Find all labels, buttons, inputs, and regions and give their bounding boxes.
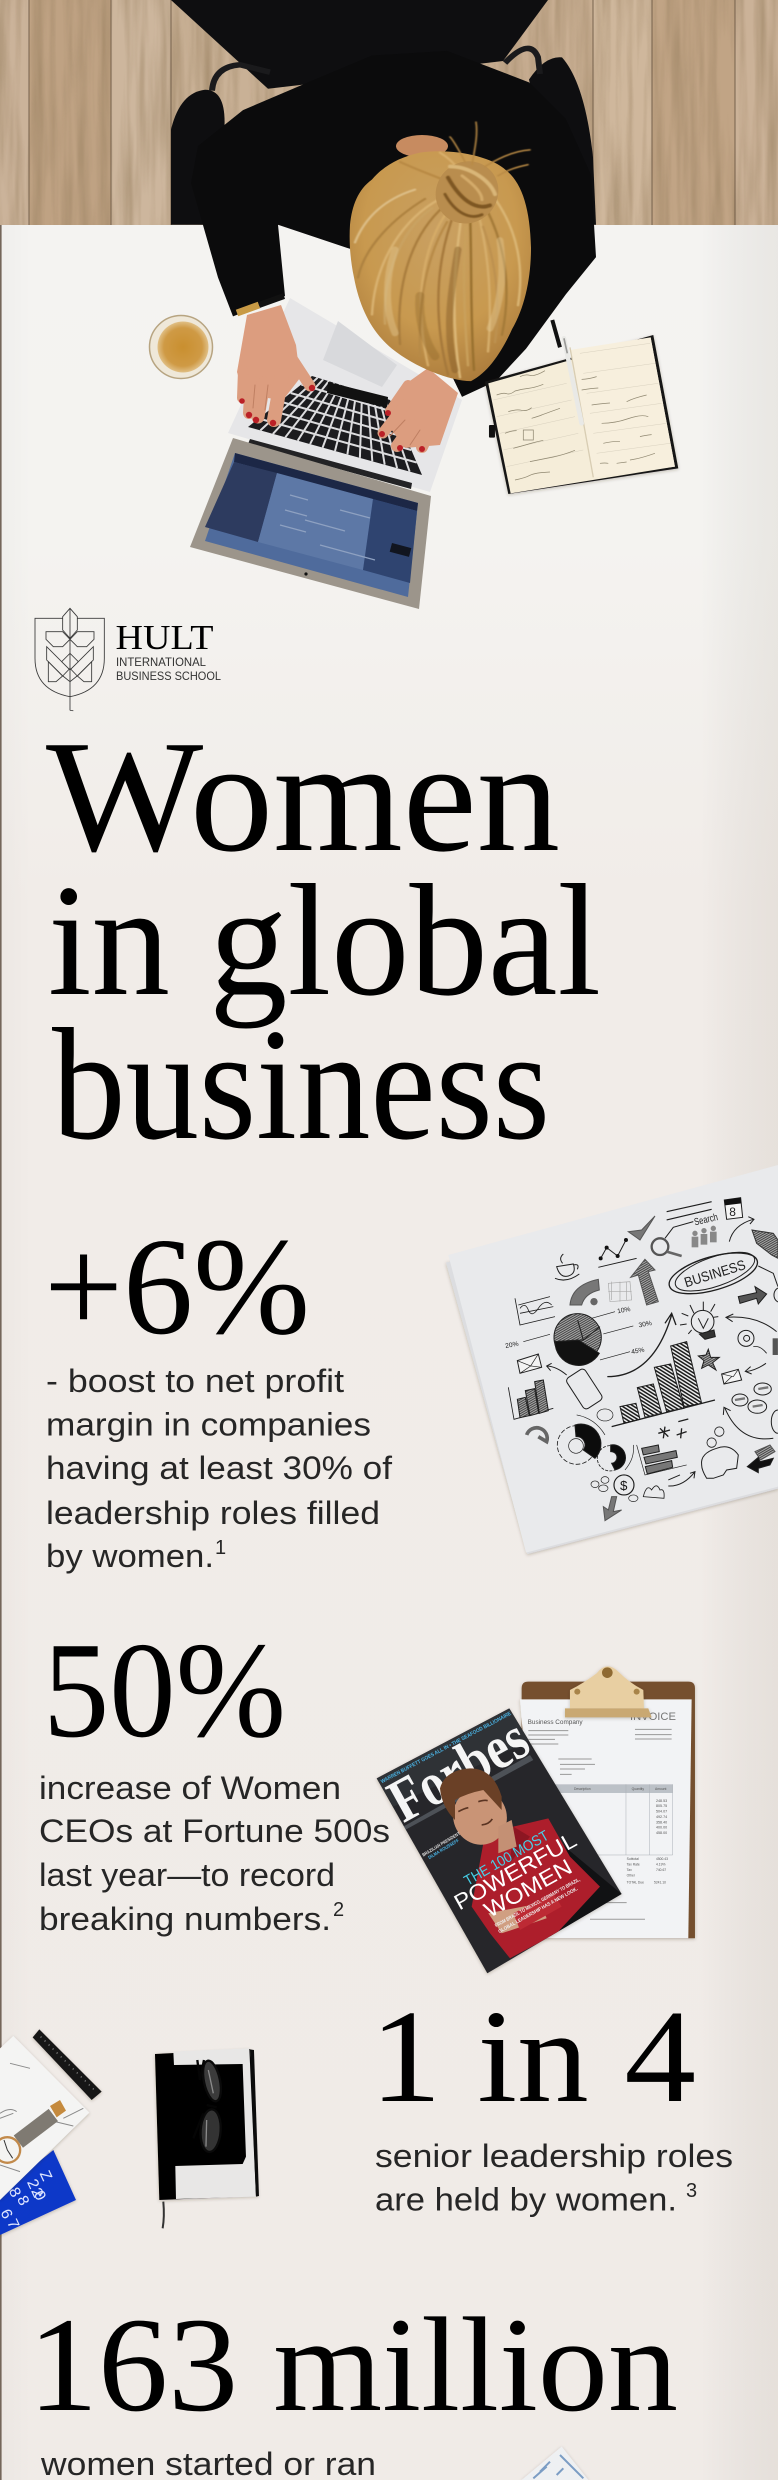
title: [46, 707, 601, 1173]
photo: Forbes magazine over invoice clipboard: Other: [627, 1873, 636, 1877]
small doodles: [508, 1216, 778, 1521]
photo: Forbes magazine over invoice clipboard: INVOICE: [630, 1711, 676, 1723]
logo wordmark: HULT: [116, 618, 214, 657]
photo: Forbes magazine over invoice clipboard: TOTAL Due: [627, 1880, 644, 1884]
clipboard with invoice: [520, 1682, 695, 1938]
pie chart: 10%: [617, 1306, 631, 1315]
stat: +6% profit margin: margin in companies: [46, 1406, 371, 1442]
stat: +6% profit margin: having at least 30% of: [46, 1450, 392, 1486]
logo: Hult International Business School: [35, 608, 221, 711]
notebook and pen: [485, 320, 678, 494]
photo: watch on marble paper with ruler and blue card: [0, 2029, 102, 2235]
Forbes magazine cover: BRAZILIAN PRESIDENT: [421, 1831, 461, 1858]
stat: +6% profit margin: - boost to net profit: [46, 1363, 344, 1399]
title: Women: [46, 707, 560, 885]
left hand on keyboard: [237, 305, 310, 420]
stat: 50% women CEOs: [39, 1614, 390, 1937]
calendar: 8: [729, 1205, 736, 1219]
blue card with numbers: 8: [4, 2184, 24, 2201]
illustration: business doodles on paper: [446, 1165, 778, 1554]
blue card with numbers: 22: [22, 2176, 47, 2201]
title: in global: [48, 851, 601, 1029]
blue card with numbers: 7: [2, 2216, 23, 2232]
blue card with numbers: 8: [12, 2193, 33, 2209]
Forbes magazine cover: FROM BRAZIL TO MEXICO, GERMANY TO BRAZIL,: [494, 1877, 582, 1929]
photo: Forbes magazine over invoice clipboard: 5241.10: [654, 1880, 666, 1884]
stat: 50% women CEOs: 50%: [43, 1614, 286, 1766]
photo: Forbes magazine over invoice clipboard: Quantity: [632, 1787, 644, 1791]
hatched bar chart: [607, 1313, 715, 1427]
logo: Hult International Business School: INTERNATIONAL: [116, 655, 206, 669]
pie chart: [505, 1306, 653, 1365]
stat: +6% profit margin: [44, 1210, 392, 1574]
search and magnifier: Search: [693, 1212, 719, 1228]
photo: Forbes magazine over invoice clipboard: 740.67: [656, 1868, 666, 1872]
photo: Forbes magazine over invoice clipboard: 458.00: [656, 1831, 667, 1835]
photo: Forbes magazine over invoice clipboard: Description: [574, 1787, 591, 1791]
business ellipse: BUSINESS: [682, 1256, 747, 1290]
photo: Forbes magazine over invoice clipboard: Tax Rate: [627, 1863, 640, 1867]
gold bracelet: [237, 305, 259, 313]
Forbes magazine cover: WARREN BUFFETT GOES ALL IN • THE SEAFOOD BILLIONAIRE: [380, 1711, 513, 1785]
photo: woman working at laptop from above: [150, 0, 678, 609]
photo: Forbes magazine over invoice clipboard: 4.19%: [656, 1863, 665, 1867]
Forbes magazine cover: THE 100 MOST: [462, 1828, 552, 1889]
pie chart: 45%: [631, 1347, 645, 1356]
hair and bun: [350, 122, 531, 381]
stat: 1 in 4 leadership roles: 1 in 4: [370, 1982, 696, 2130]
photo: Forbes magazine over invoice clipboard: 504.07: [656, 1810, 667, 1814]
photo: black notebook with glasses: [155, 2048, 259, 2228]
photo: Forbes magazine over invoice clipboard: 400.00: [656, 1826, 667, 1830]
photo: Forbes magazine over invoice clipboard: 805.75: [656, 1804, 667, 1808]
Forbes magazine cover: [377, 1704, 622, 1973]
photo: Forbes magazine over invoice clipboard: Amount: [655, 1787, 667, 1791]
gold clip: [565, 1666, 652, 1717]
blue card with numbers: Z: [35, 2168, 55, 2184]
stat: 50% women CEOs: increase of Women: [39, 1770, 341, 1806]
stat: +6% profit margin: +6%: [44, 1210, 310, 1364]
logo emblem: shield and leaf: [35, 608, 104, 711]
blue card with numbers: [0, 2150, 76, 2235]
Forbes magazine cover: POWERFUL: [450, 1827, 581, 1915]
stat: 1 in 4 leadership roles: [370, 1982, 733, 2218]
stat: 1 in 4 leadership roles: 3: [686, 2180, 697, 2202]
stat: 50% women CEOs: breaking numbers.: [39, 1901, 331, 1937]
blue card with numbers: 0: [29, 2188, 49, 2204]
black ruler: [33, 2029, 102, 2100]
photo: Forbes magazine over invoice clipboard: Business Company: [528, 1720, 583, 1726]
stat: +6% profit margin: 1: [215, 1537, 226, 1559]
stat: 50% women CEOs: CEOs at Fortune 500s: [39, 1813, 390, 1849]
small doodles: $: [620, 1478, 628, 1493]
coffee cup: [150, 316, 212, 378]
laptop base: [228, 298, 462, 492]
photo: Forbes magazine over invoice clipboard: Tax: [627, 1868, 632, 1872]
marble paper: [0, 2036, 89, 2200]
right hand on keyboard: [383, 368, 458, 448]
pie chart: 30%: [638, 1320, 653, 1329]
photo: Forbes magazine over invoice clipboard: 492.74: [656, 1815, 667, 1819]
Forbes magazine cover: DILMA ROUSSEFF: [427, 1838, 460, 1860]
photo: Forbes magazine over invoice clipboard: Subtotal: [627, 1857, 639, 1861]
Forbes magazine cover: WOMEN: [480, 1854, 576, 1923]
stat: 50% women CEOs: 2: [333, 1899, 344, 1921]
stat: 50% women CEOs: last year—to record: [39, 1857, 335, 1893]
stat: 163 million women: 163 million: [28, 2291, 678, 2440]
jacket: [472, 1818, 600, 1958]
photo: Forbes magazine over invoice clipboard: 4500.43: [656, 1857, 668, 1861]
title: business: [52, 995, 550, 1173]
calendar: [724, 1198, 743, 1219]
wristwatch: [0, 2100, 66, 2164]
black jacket: [191, 51, 596, 397]
logo: Hult International Business School: BUSINESS SCHOOL: [116, 669, 221, 683]
stat: +6% profit margin: leadership roles filled: [46, 1495, 380, 1531]
face: [453, 1790, 507, 1845]
stat: +6% profit margin: by women.: [46, 1538, 214, 1574]
glasses: [193, 2059, 224, 2153]
photo: Forbes magazine over invoice clipboard: 358.40: [656, 1820, 667, 1824]
photo: Forbes magazine over invoice clipboard: [377, 1666, 695, 1973]
photo: Forbes magazine over invoice clipboard: 248.53: [656, 1799, 667, 1803]
Forbes magazine cover: GLOBAL LEADERSHIP HAS A NEW LOOK.: [497, 1886, 579, 1935]
photo: wooden floor: [0, 0, 778, 225]
business ellipse: [668, 1252, 758, 1294]
stat: 1 in 4 leadership roles: are held by women.: [375, 2182, 677, 2218]
Forbes magazine cover: Forbes: [377, 1704, 540, 1836]
search and magnifier: [652, 1202, 719, 1256]
laptop screen: [190, 438, 431, 609]
photo: document corner at page bottom: [522, 2447, 588, 2480]
stat: 1 in 4 leadership roles: senior leadership roles: [375, 2138, 733, 2174]
office chair: [171, 0, 596, 225]
pie chart: 20%: [505, 1341, 519, 1350]
